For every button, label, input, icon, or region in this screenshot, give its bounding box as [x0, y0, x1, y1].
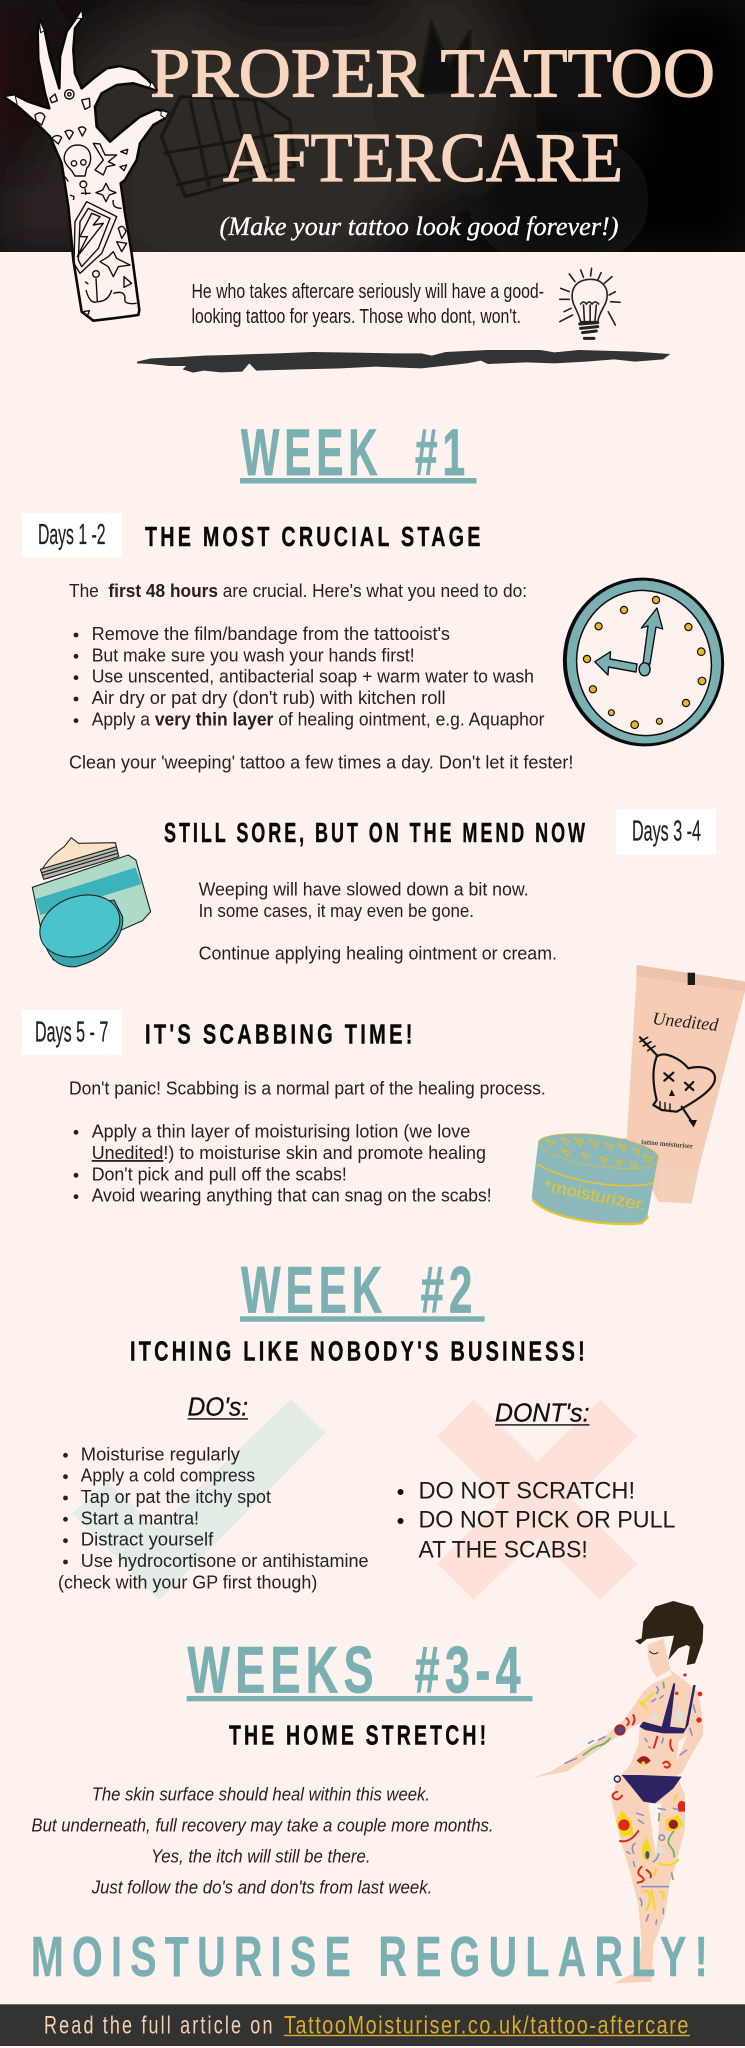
bullet list: dont's: AT THE SCABS!	[418, 1536, 588, 1563]
heading: week 1: WEEK #1	[241, 415, 470, 489]
panel: do's	[58, 1392, 369, 1592]
label: days 5-7	[22, 1010, 122, 1055]
intro text: looking tattoo for years. Those who dont, won't.	[192, 306, 521, 328]
bullet list: do's: Start a mantra!	[81, 1508, 199, 1528]
bullet list: first steps: Remove the film/bandage from the tattooist's	[92, 624, 450, 644]
title	[150, 36, 715, 197]
body text: weeping slowed: In some cases, it may even be gone.	[199, 901, 474, 921]
panel: dont's	[398, 1398, 676, 1563]
panel: header photo background	[0, 0, 745, 252]
text block: healing notes: The skin surface should heal within this week.	[92, 1784, 430, 1804]
body text: weeping slowed: Continue applying healing ointment or cream.	[199, 944, 557, 964]
bullet list: do's: (check with your GP first though)	[58, 1572, 317, 1592]
bullet list: first steps: Apply a very thin layer of healing ointment, e.g. Aquaphor	[92, 710, 544, 730]
label: days 1-2: Days 1 -2	[38, 519, 106, 551]
panel: days 1-2	[22, 513, 737, 772]
body text: weeping tattoo: Clean your 'weeping' tattoo a few times a day. Don't let it fester!	[69, 752, 573, 772]
bullet list: dont's: DO NOT SCRATCH!	[418, 1478, 635, 1505]
footer bar	[0, 2004, 745, 2046]
panel: days 3-4	[24, 809, 716, 967]
bullet list: dont's	[398, 1478, 676, 1563]
tube product label: tattoo moisturiser	[641, 1137, 694, 1151]
body text: weeping slowed	[199, 880, 557, 964]
icon: check mark watermark	[72, 1399, 325, 1600]
illustration: tattooed woman	[533, 1601, 703, 1983]
bullet list: scabbing care: Don't pick and pull off the scabs!	[92, 1164, 347, 1184]
bullet list: do's: Distract yourself	[81, 1530, 214, 1550]
bullet list: do's: Use hydrocortisone or antihistamine	[81, 1551, 369, 1571]
body text: first 48 hours: The first 48 hours are crucial. Here's what you need to do:	[69, 581, 527, 601]
bullet list: scabbing care: Avoid wearing anything that can snag on the scabs!	[92, 1186, 492, 1206]
heading: do's: DO's:	[188, 1392, 248, 1422]
bullet list: do's: Apply a cold compress	[81, 1466, 255, 1486]
intro text	[192, 281, 544, 328]
heading: week 2	[240, 1252, 485, 1326]
bullet list: scabbing care: Apply a thin layer of moisturising lotion (we love	[92, 1121, 470, 1141]
footer text: Read the full article on	[44, 2011, 275, 2039]
panel: days 5-7	[22, 1010, 546, 1206]
body text: scabbing: Don't panic! Scabbing is a normal part of the healing process.	[69, 1079, 546, 1099]
subheading: most crucial stage: THE MOST CRUCIAL STAGE	[145, 521, 484, 552]
subheading: scabbing time: IT'S SCABBING TIME!	[145, 1018, 416, 1049]
text block: healing notes: Yes, the itch will still be there.	[151, 1847, 370, 1867]
intro text: He who takes aftercare seriously will have a good-	[192, 281, 544, 303]
heading: weeks 3-4	[187, 1632, 532, 1706]
label: days 5-7: Days 5 - 7	[35, 1017, 108, 1049]
bullet list: first steps: But make sure you wash your hands first!	[92, 645, 415, 665]
label: days 3-4	[616, 809, 716, 855]
bullet list: do's: Moisturise regularly	[81, 1444, 240, 1464]
text block: healing notes	[31, 1784, 494, 1898]
bullet list: first steps: Air dry or pat dry (don't rub) with kitchen roll	[92, 688, 446, 708]
heading: dont's: DONT's:	[495, 1398, 590, 1428]
heading: week 1	[240, 415, 476, 489]
heading: week 2: WEEK #2	[241, 1252, 477, 1326]
title: PROPER TATTOO	[150, 36, 715, 113]
subheading: itching: ITCHING LIKE NOBODY'S BUSINESS!	[130, 1336, 588, 1367]
icon: tattooed hand	[5, 10, 168, 321]
bullet list: scabbing care: Unedited!) to moisturise skin and promote healing	[92, 1143, 486, 1163]
bullet list: do's: Tap or pat the itchy spot	[81, 1487, 271, 1507]
subtitle: (Make your tattoo look good forever!)	[220, 212, 618, 241]
bullet list: first steps	[74, 624, 544, 730]
bullet list: dont's: DO NOT PICK OR PULL	[418, 1507, 676, 1534]
subheading: home stretch: THE HOME STRETCH!	[229, 1720, 489, 1751]
icon: clock	[550, 565, 737, 759]
icon: moisturiser jar	[532, 1134, 658, 1225]
label: days 1-2	[22, 513, 122, 557]
icon: ointment jar	[24, 838, 151, 967]
icon: light bulb	[560, 268, 620, 338]
icon: cross watermark	[437, 1399, 638, 1600]
icon: moisturiser tube	[627, 965, 745, 1203]
text block: healing notes: But underneath, full recovery may take a couple more months.	[31, 1815, 494, 1835]
title: AFTERCARE	[223, 120, 623, 197]
tube brand label: Unedited	[652, 1008, 720, 1035]
body text: weeping slowed: Weeping will have slowed down a bit now.	[199, 880, 529, 900]
bullet list: first steps: Use unscented, antibacterial soap + warm water to wash	[92, 667, 534, 687]
jar label: *moisturizer.	[542, 1176, 648, 1215]
heading: weeks 3-4: WEEKS #3-4	[188, 1632, 526, 1706]
decorative brush stroke divider	[137, 350, 670, 373]
bullet list: do's	[58, 1444, 369, 1592]
bullet list: scabbing care	[74, 1121, 492, 1206]
text block: healing notes: Just follow the do's and don'ts from last week.	[91, 1878, 432, 1898]
